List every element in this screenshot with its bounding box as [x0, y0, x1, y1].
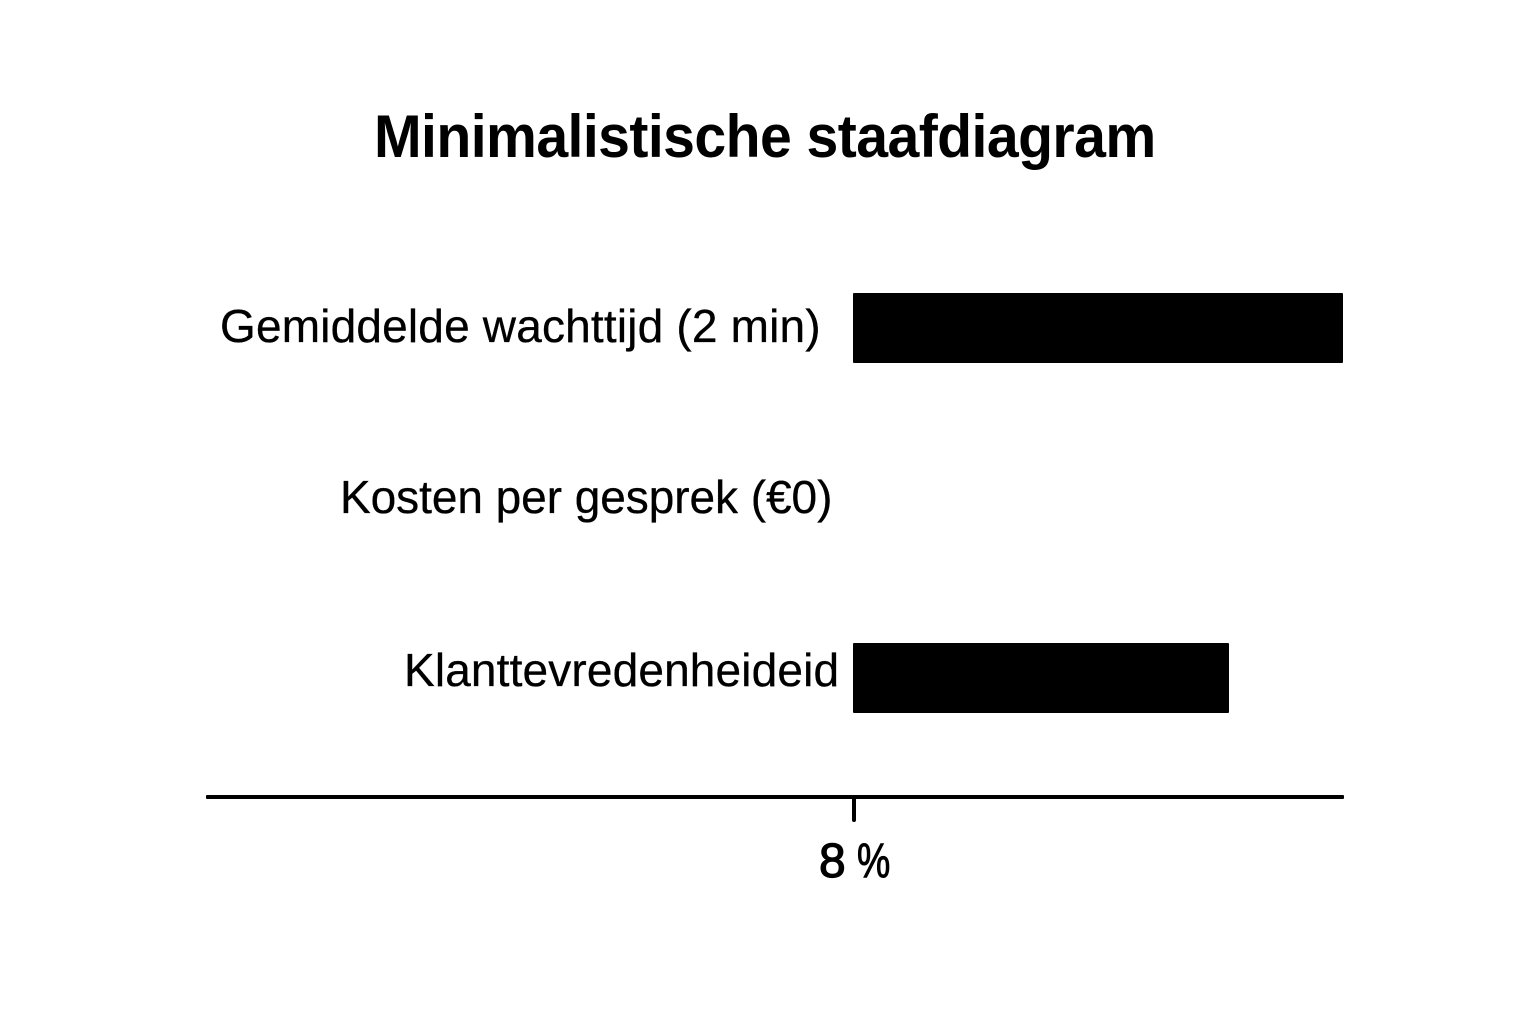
bar: klanttevredenheid: [853, 643, 1229, 713]
title: Minimalistische staafdiagram: [374, 103, 1156, 170]
axis label: 8: [819, 835, 846, 888]
axis label: [819, 835, 890, 888]
label: kosten: Kosten per gesprek (€0): [340, 471, 832, 523]
chart: [206, 293, 1344, 888]
axis label: %: [857, 835, 890, 888]
bar: wachttijd: [853, 293, 1343, 363]
axis tick: [852, 797, 856, 822]
label: wachttijd: Gemiddelde wachttijd (2 min): [220, 300, 821, 352]
label: klanttevredenheid: Klanttevredenheideid: [404, 644, 839, 696]
axis line: [206, 795, 1344, 799]
